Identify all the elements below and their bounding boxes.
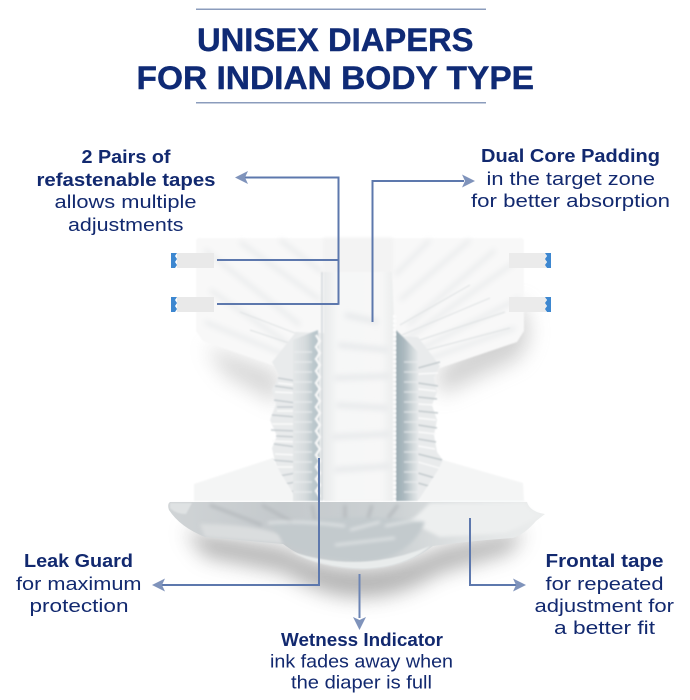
fastening tape: upper left — [171, 253, 214, 268]
crotch ruffles — [256, 332, 460, 500]
arrow: frontal tape — [470, 518, 526, 592]
callout: wetness indicator: the diaper is full — [291, 672, 432, 692]
arrow: leak guard — [152, 458, 319, 592]
callout: dual core padding — [471, 145, 670, 211]
inner cuff edges — [316, 272, 394, 501]
fastening tape: upper right — [509, 253, 551, 268]
arrow: wetness indicator — [353, 574, 366, 630]
callout: dual core padding: for better absorption — [471, 190, 670, 211]
callout: dual core padding: Dual Core Padding — [481, 145, 660, 166]
callout: leak guard: protection — [30, 595, 128, 616]
callout: refastenable tapes: 2 Pairs of — [82, 146, 171, 167]
title block: FOR INDIAN BODY TYPE — [136, 60, 534, 96]
title block: UNISEX DIAPERS — [197, 22, 474, 58]
callout: refastenable tapes — [36, 146, 216, 235]
fastening tape: lower left — [171, 297, 214, 312]
callout: frontal tape: adjustment for — [534, 595, 674, 616]
arrow: dual core padding — [372, 174, 475, 322]
callout: leak guard — [16, 550, 142, 616]
rear wings — [194, 458, 524, 501]
fastening tape: lower right — [509, 297, 551, 312]
callout: refastenable tapes: allows multiple — [54, 191, 196, 212]
callout: refastenable tapes: refastenable tapes — [36, 169, 216, 190]
callout: leak guard: for maximum — [16, 573, 142, 594]
callout: wetness indicator: Wetness Indicator — [281, 629, 443, 650]
callout: wetness indicator: ink fades away when — [270, 650, 453, 672]
diaper illustration — [168, 238, 551, 597]
callout: leak guard: Leak Guard — [24, 550, 133, 571]
callout: refastenable tapes: adjustments — [68, 214, 184, 235]
right cuff — [396, 330, 418, 501]
callout: wetness indicator — [270, 629, 453, 692]
callout: frontal tape: for repeated — [546, 573, 664, 594]
callout: frontal tape: a better fit — [554, 617, 655, 638]
callout: dual core padding: in the target zone — [486, 168, 655, 189]
left cuff — [293, 330, 320, 501]
absorbent core — [324, 272, 394, 501]
callout: frontal tape — [534, 550, 674, 638]
drop shadows — [185, 300, 530, 597]
arrow: refastenable tapes — [217, 171, 338, 305]
waist fold striations — [205, 240, 520, 362]
front waist panel — [168, 502, 545, 569]
cuff texture — [294, 352, 418, 492]
back waist panel — [196, 238, 524, 368]
title block — [136, 8, 534, 104]
callout: frontal tape: Frontal tape — [546, 550, 664, 571]
front panel shading — [170, 503, 540, 569]
